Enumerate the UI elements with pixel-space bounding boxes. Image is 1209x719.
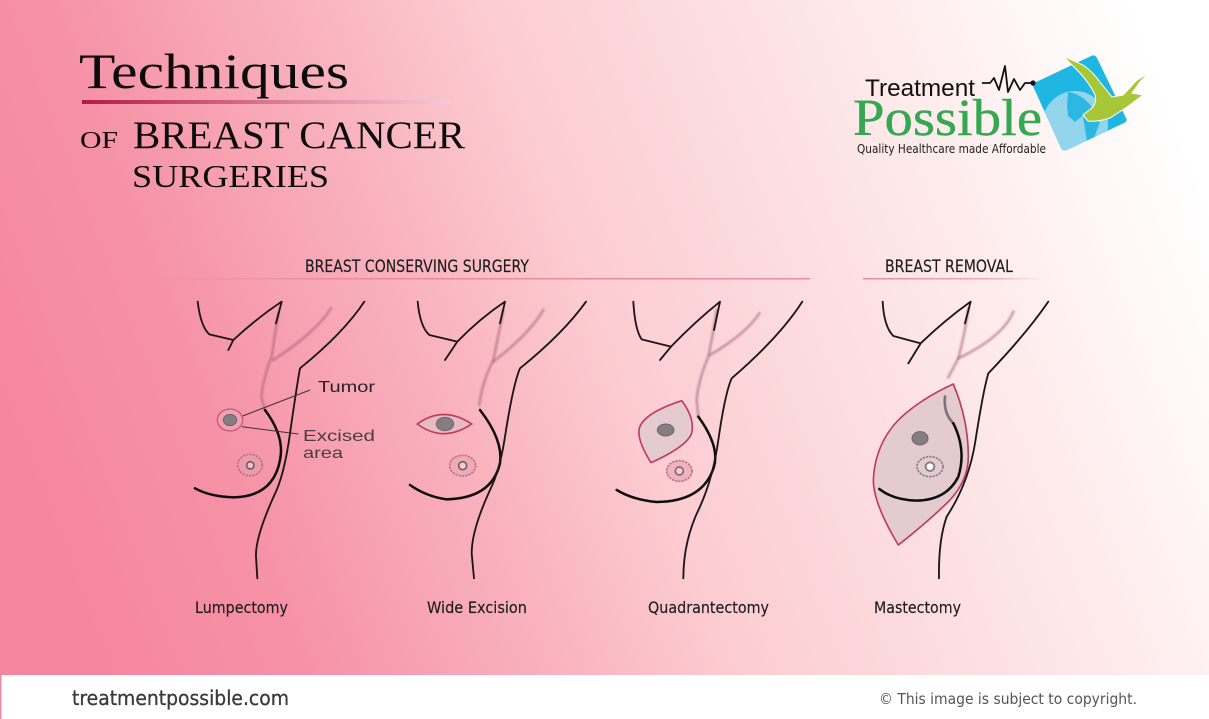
figure: quadrantectomy — [617, 302, 802, 578]
footer: copyright: © This image is subject to copyright. — [879, 690, 1137, 708]
label: excised area: area — [303, 445, 343, 462]
section header: breast conserving surgery: BREAST CONSERVING SURGERY — [305, 257, 530, 276]
heading: Techniques: Techniques — [79, 43, 349, 99]
figure: lumpectomy — [195, 302, 364, 578]
logo icon: green bird — [1063, 56, 1151, 121]
logo heartbeat line — [982, 66, 1033, 92]
caption: wide excision: Wide Excision — [427, 598, 527, 617]
caption: lumpectomy: Lumpectomy — [195, 598, 288, 617]
subheading: breast cancer: BREAST CANCER — [133, 114, 465, 157]
figure: mastectomy — [873, 302, 1048, 578]
caption: quadrantectomy: Quadrantectomy — [648, 598, 769, 617]
logo icon: blue tile with globe — [1032, 55, 1127, 159]
caption: mastectomy: Mastectomy — [874, 598, 961, 617]
logo text: Possible: Possible — [853, 90, 1042, 147]
logo heartbeat dot — [1030, 80, 1036, 86]
label: tumor: Tumor — [318, 379, 376, 396]
label: excised area: Excised — [303, 428, 375, 445]
figure: wide excision — [410, 302, 586, 578]
footer — [0, 675, 1209, 719]
title block — [79, 43, 465, 194]
subheading: of: OF — [80, 128, 118, 154]
title underline — [82, 100, 450, 104]
section header: breast removal: BREAST REMOVAL — [885, 257, 1014, 276]
logo tagline: Quality Healthcare made Affordable — [857, 141, 1046, 156]
subheading: surgeries: SURGERIES — [132, 158, 329, 194]
footer: website: treatmentpossible.com — [72, 686, 289, 710]
logo text: Treatment: Treatment — [865, 75, 975, 102]
logo: Treatment Possible — [853, 55, 1151, 159]
